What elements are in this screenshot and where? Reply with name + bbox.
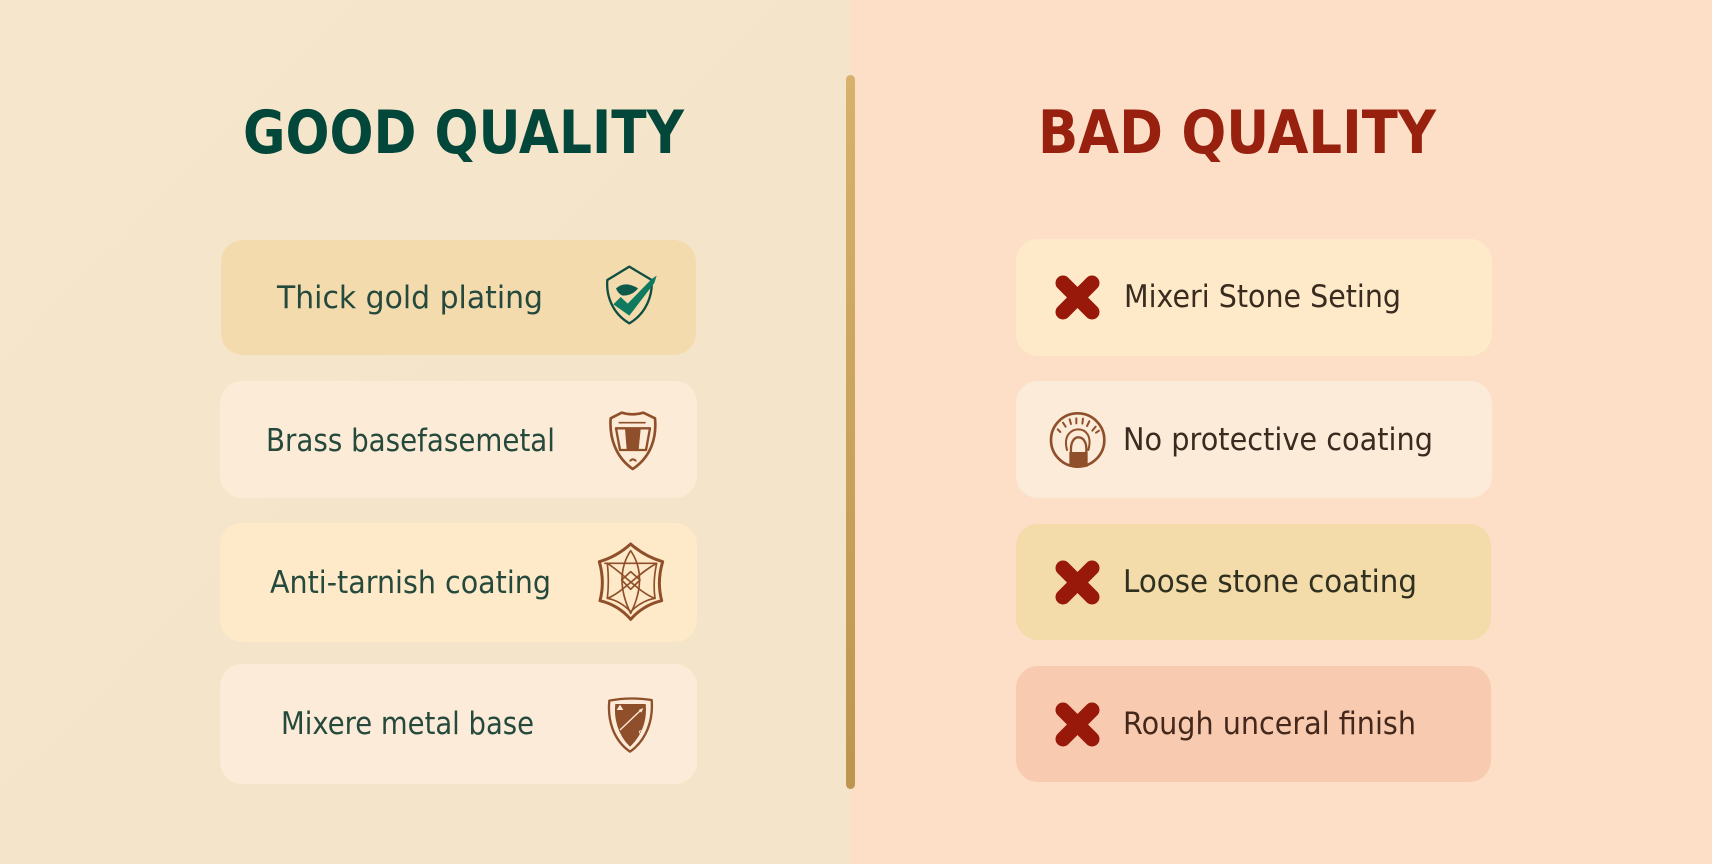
label: mixed metal base: Mixere metal base [281,706,534,742]
icon: shield with check [607,267,657,323]
label: thick gold plating: Thick gold plating [276,280,543,316]
icon: brass shield [610,413,655,469]
label: no protective coating: No protective coating [1123,422,1433,458]
card: anti-tarnish coating [220,523,697,642]
icon: lock in circle [1051,413,1104,468]
panel: bad quality background [851,0,1712,864]
card: loose stone coating [1016,524,1491,640]
label: mixed stone setting: Mixeri Stone Seting [1124,279,1401,315]
card: mixed stone setting [1016,239,1492,356]
divider [846,75,855,789]
label: brass base metal: Brass basefasemetal [266,423,555,459]
card: no protective coating [1016,381,1492,498]
panel: good quality list [220,240,697,784]
card: rough uneven finish [1016,666,1491,782]
heading: good quality: GOOD QUALITY [243,98,685,168]
icon: red cross [1063,568,1092,597]
heading: bad quality: BAD QUALITY [1038,98,1437,168]
icon: red cross [1063,710,1092,739]
label: rough uneven finish: Rough unceral finish [1123,706,1416,742]
label: loose stone coating: Loose stone coating [1123,564,1417,600]
card: thick gold plating [221,240,696,355]
panel: good quality background [0,0,851,864]
panel: bad quality list [1016,239,1492,782]
icon: hexagonal web [599,544,663,619]
card: brass base metal [220,381,697,498]
icon: split shield [609,698,652,752]
card: mixed metal base [220,664,697,784]
label: anti-tarnish coating: Anti-tarnish coating [270,565,551,601]
icon: red cross [1063,283,1092,312]
